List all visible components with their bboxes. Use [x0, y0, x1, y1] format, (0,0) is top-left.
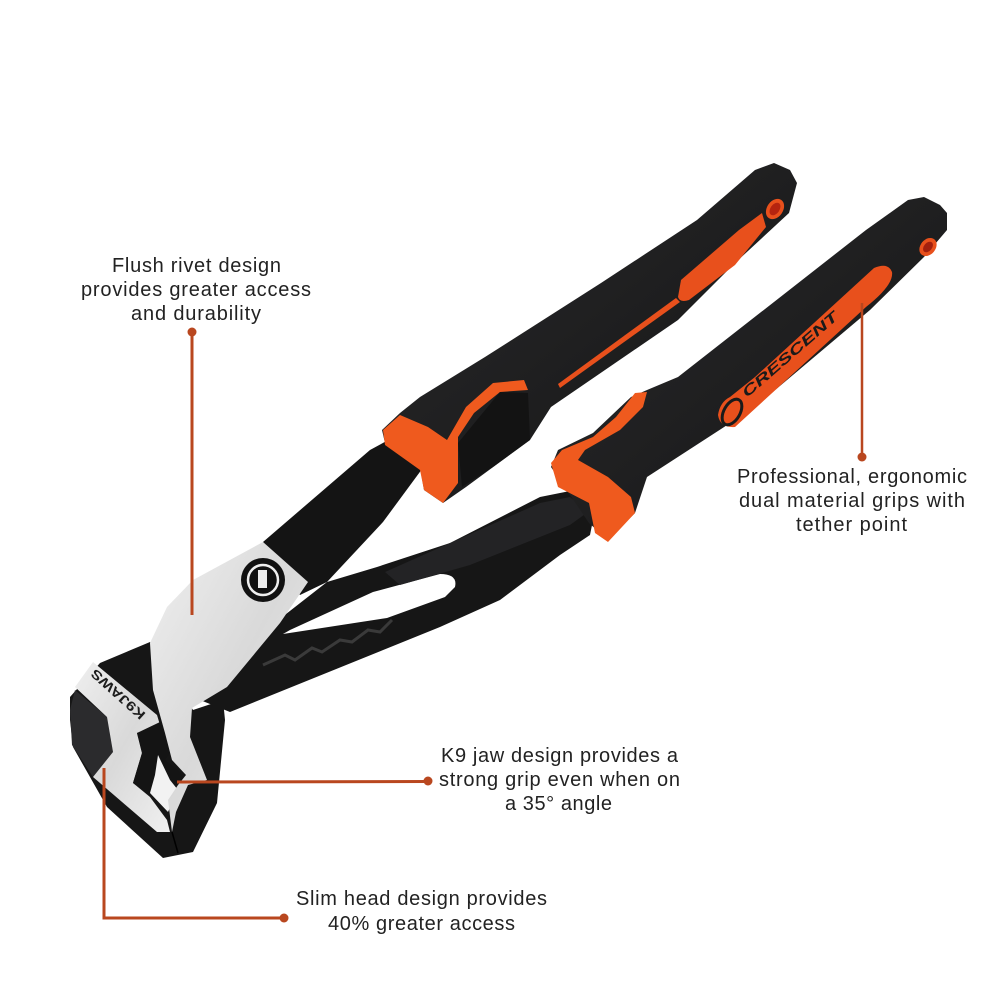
- lower jaw dark inset: [70, 690, 113, 777]
- right handle grip: [551, 197, 947, 540]
- callout text: 40% greater access: [328, 913, 515, 935]
- head tip split: [172, 832, 178, 853]
- brand icon on grip: [718, 396, 746, 428]
- callout text: tether point: [796, 514, 907, 536]
- left handle collar: [383, 380, 528, 503]
- callout text: [439, 745, 680, 815]
- upper arm: [263, 438, 425, 595]
- left handle orange stripe: [558, 298, 680, 388]
- callout line: [188, 328, 196, 615]
- left handle orange inlay: [678, 213, 766, 301]
- callout text: K9 jaw design provides a: [441, 745, 679, 767]
- callout: slim head: [104, 768, 547, 935]
- callout text: dual material grips with: [739, 490, 965, 512]
- left handle grip: [382, 163, 797, 503]
- lower arm with slot: [200, 490, 595, 712]
- upper jaw steel plate: [150, 542, 308, 832]
- lower jaw black body: [70, 642, 225, 858]
- left handle tether hole: [762, 195, 788, 223]
- callout text: a 35° angle: [505, 793, 612, 815]
- left handle ribbed grip: [458, 392, 530, 487]
- jaw teeth: [133, 722, 186, 812]
- callout: flush rivet: [81, 255, 311, 615]
- illustration: pliers: [70, 163, 947, 858]
- callout dot: [280, 914, 288, 922]
- callout text: [296, 888, 547, 935]
- callout line: [104, 768, 284, 918]
- callout line: [177, 776, 432, 786]
- callout text: Slim head design provides: [296, 888, 547, 910]
- callout text: [737, 466, 967, 536]
- jaw gap: [150, 755, 178, 812]
- K9 Jaws mark: K9JAWS: [87, 666, 148, 723]
- callout text: strong grip even when on: [439, 769, 680, 791]
- right handle collar: [551, 392, 647, 542]
- right handle orange panel: [718, 266, 892, 427]
- callout text: provides greater access: [81, 279, 311, 301]
- rivet logo: [241, 558, 285, 602]
- callout text: and durability: [131, 303, 261, 325]
- callout text: [81, 255, 311, 325]
- callout text: Flush rivet design: [112, 255, 281, 277]
- callout: jaw: [177, 745, 680, 815]
- lower jaw steel face: [75, 662, 170, 832]
- lower arm highlight: [385, 497, 588, 585]
- callout: grips: [737, 303, 967, 536]
- callout text: Professional, ergonomic: [737, 466, 967, 488]
- right handle tether hole: [916, 235, 940, 259]
- brand label on grip: CRESCENT: [738, 307, 843, 400]
- lower arm teeth: [263, 620, 392, 665]
- callout line: [858, 303, 866, 462]
